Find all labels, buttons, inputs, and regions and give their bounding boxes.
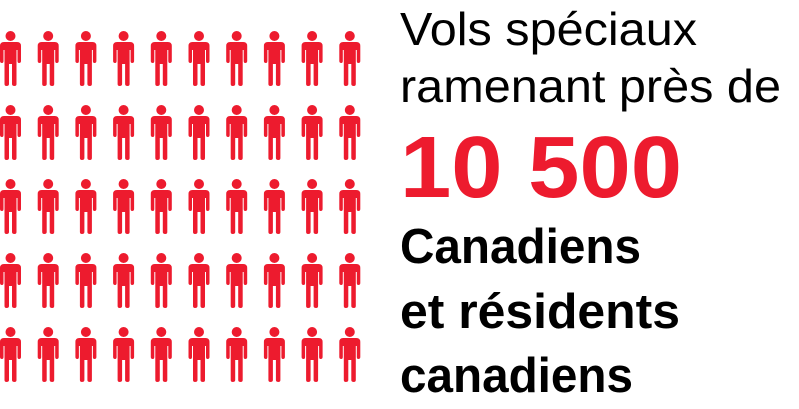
heading text: ramenant près de (400, 60, 781, 112)
subtitle text: et résidents (400, 285, 680, 339)
big number: 10 500 (400, 119, 682, 216)
subtitle text: canadiens (400, 349, 633, 403)
heading text (400, 3, 781, 112)
icon grid: people (0, 31, 360, 382)
subtitle text (400, 220, 680, 403)
subtitle text: Canadiens (400, 220, 641, 274)
heading text: Vols spéciaux (400, 3, 697, 55)
